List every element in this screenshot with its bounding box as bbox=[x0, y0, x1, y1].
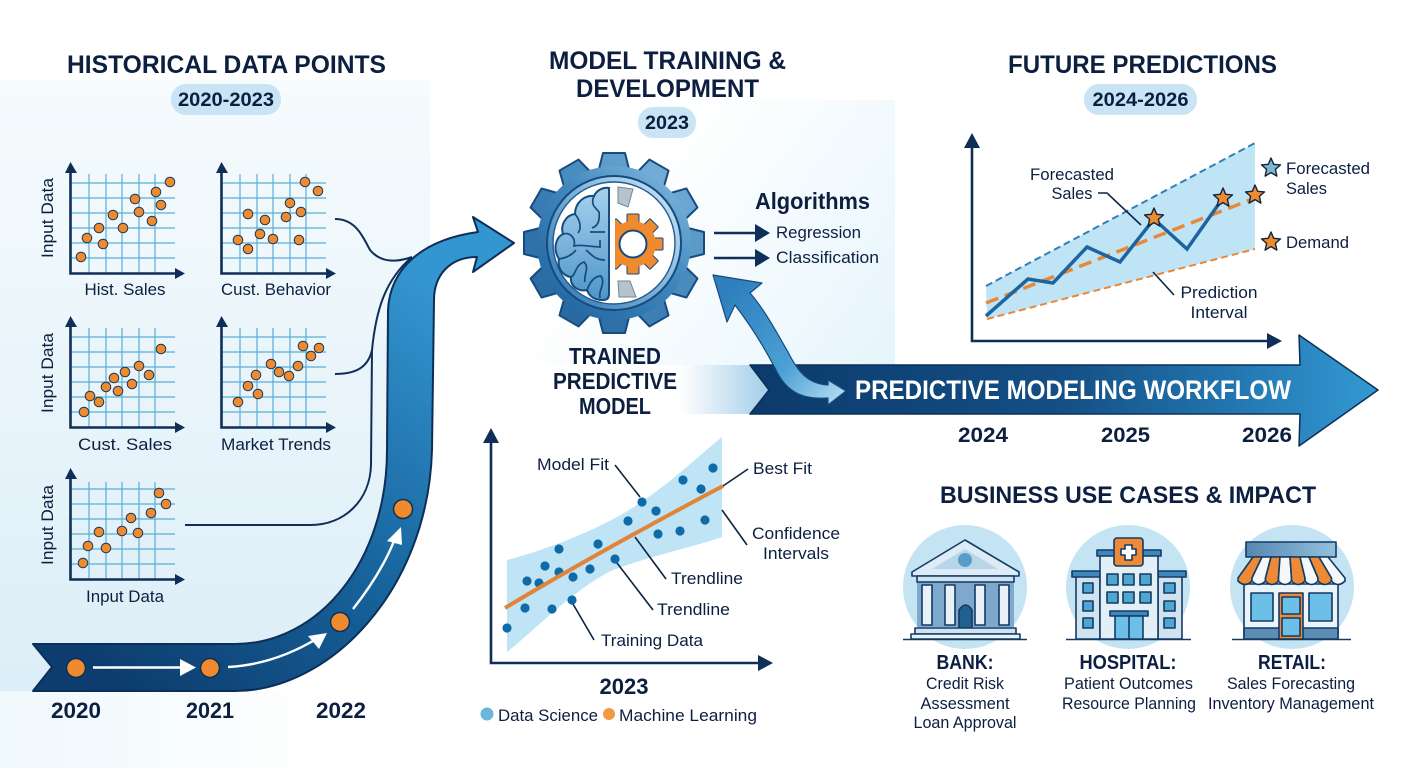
annotation labels: Intervals bbox=[763, 544, 829, 563]
panel: model training background bbox=[430, 100, 895, 365]
chart: cust. sales: Cust. Sales bbox=[78, 435, 172, 454]
heading: historical data points: HISTORICAL DATA POINTS bbox=[67, 51, 386, 79]
gray inserts bbox=[618, 187, 636, 297]
legend: data science and machine learning: Machine Learning bbox=[619, 706, 757, 725]
use case: bank: Credit Risk bbox=[926, 674, 1004, 693]
chart: cust. behavior: Cust. Behavior bbox=[221, 280, 331, 299]
use case: retail bbox=[1208, 525, 1374, 713]
timeline years: 2021 bbox=[186, 698, 234, 723]
annotation: forecasted sales bbox=[1030, 165, 1141, 225]
timeline ribbon arrow bbox=[33, 217, 514, 691]
annotation: forecasted sales: Forecasted bbox=[1030, 165, 1114, 184]
forecast line bbox=[986, 198, 1223, 316]
annotation labels: Model Fit bbox=[537, 455, 609, 474]
gear body bbox=[537, 166, 691, 320]
annotation leaders bbox=[573, 465, 748, 640]
annotation: forecasted sales: Sales bbox=[1052, 184, 1092, 203]
chart: future predictions bbox=[964, 133, 1370, 349]
label: 2023: 2023 bbox=[600, 674, 648, 699]
heading: model training: 2023 bbox=[645, 113, 689, 134]
chart: model fit 2023 bbox=[483, 428, 840, 671]
prediction band bbox=[986, 143, 1255, 319]
white flow arrows bbox=[93, 536, 396, 668]
axes bbox=[491, 436, 762, 663]
brain folds bbox=[559, 196, 605, 298]
heading: business use cases: BUSINESS USE CASES & IMPACT bbox=[940, 482, 1316, 509]
legend: forecasted sales bbox=[1262, 158, 1370, 198]
algorithms list: Regression bbox=[776, 223, 861, 242]
timeline years: 2020 bbox=[51, 698, 101, 723]
heading: model training: DEVELOPMENT bbox=[576, 75, 759, 103]
workflow years: 2024 bbox=[958, 424, 1008, 447]
workflow years: 2025 bbox=[1101, 424, 1150, 447]
chart: hist. sales: Input Data bbox=[38, 177, 57, 258]
white arrowheads bbox=[180, 527, 402, 676]
chart: hist. sales bbox=[38, 162, 185, 299]
chart: market trends: Market Trends bbox=[221, 435, 331, 454]
double-headed curved arrow bbox=[713, 275, 846, 405]
workflow years: 2026 bbox=[1242, 424, 1292, 447]
chart: cust. sales bbox=[38, 316, 185, 454]
panel: historical data background bbox=[0, 80, 432, 691]
heading: future predictions: 2024-2026 bbox=[1092, 90, 1188, 111]
use case: hospital: HOSPITAL: bbox=[1080, 652, 1176, 674]
legend: demand bbox=[1262, 232, 1349, 252]
axes bbox=[972, 142, 1270, 341]
legend: demand: Demand bbox=[1286, 233, 1349, 252]
label: trained predictive model bbox=[553, 343, 677, 419]
brain bbox=[556, 188, 609, 300]
timeline years bbox=[51, 698, 366, 723]
label: trained predictive model: MODEL bbox=[579, 393, 651, 419]
annotation labels: Trendline bbox=[657, 600, 730, 619]
fade behind workflow arrow bbox=[680, 365, 772, 414]
algorithms list: Algorithms bbox=[755, 188, 870, 214]
algorithms list: Classification bbox=[776, 248, 879, 267]
demand trend bbox=[986, 198, 1255, 303]
annotation labels bbox=[537, 455, 840, 650]
use case: bank: Assessment bbox=[920, 694, 1010, 713]
use case: bank: BANK: bbox=[936, 652, 994, 674]
annotation: prediction interval bbox=[1153, 272, 1258, 322]
heading: historical data points bbox=[67, 51, 386, 115]
chart: input data: Input Data bbox=[86, 587, 165, 606]
heading: model training: MODEL TRAINING & bbox=[549, 47, 786, 75]
annotation labels: Best Fit bbox=[753, 459, 812, 478]
use case: hospital bbox=[1062, 525, 1196, 713]
chart: input data: Input Data bbox=[38, 484, 57, 565]
label: trained predictive model: PREDICTIVE bbox=[553, 368, 677, 394]
forecast stars bbox=[1144, 185, 1264, 226]
icon: retail store bbox=[1232, 542, 1351, 640]
workflow arrow: PREDICTIVE MODELING WORKFLOW bbox=[855, 375, 1291, 405]
connector lines from charts to ribbon bbox=[185, 219, 412, 525]
legend: data science and machine learning bbox=[480, 706, 757, 725]
label: trained predictive model: TRAINED bbox=[569, 343, 661, 369]
legend: data science and machine learning: Data Science bbox=[498, 706, 598, 725]
gear teeth bbox=[524, 153, 704, 333]
annotation labels: Trendline bbox=[671, 569, 743, 588]
chart: cust. behavior bbox=[216, 162, 336, 299]
training points bbox=[502, 463, 718, 633]
legend: forecasted sales: Sales bbox=[1286, 179, 1327, 198]
icon: bank building bbox=[903, 540, 1027, 640]
heading: model training bbox=[549, 47, 786, 138]
use case: bank bbox=[903, 525, 1027, 732]
heading: future predictions: FUTURE PREDICTIONS bbox=[1008, 51, 1277, 79]
annotation labels: Confidence bbox=[752, 524, 840, 543]
annotation: prediction interval: Prediction bbox=[1180, 283, 1258, 302]
use case: bank: Loan Approval bbox=[914, 713, 1016, 732]
chart: input data bbox=[38, 468, 185, 606]
heading: historical data points: 2020-2023 bbox=[178, 90, 274, 111]
use case: retail: Inventory Management bbox=[1208, 694, 1374, 713]
use case: retail: Sales Forecasting bbox=[1227, 674, 1355, 693]
workflow years bbox=[958, 424, 1292, 447]
timeline dots bbox=[66, 500, 412, 678]
legend: forecasted sales: Forecasted bbox=[1286, 159, 1370, 178]
orange gear bbox=[615, 214, 664, 274]
algorithms list bbox=[714, 188, 879, 267]
use case: hospital: Patient Outcomes bbox=[1064, 674, 1193, 693]
best fit line bbox=[505, 486, 723, 608]
annotation: prediction interval: Interval bbox=[1190, 303, 1248, 322]
chart: hist. sales: Hist. Sales bbox=[84, 280, 166, 299]
chart: cust. sales: Input Data bbox=[38, 332, 57, 413]
heading: future predictions bbox=[1008, 51, 1277, 115]
annotation labels: Training Data bbox=[601, 631, 704, 650]
confidence band bbox=[507, 437, 722, 652]
panel: bottom left fade bbox=[0, 691, 330, 768]
workflow arrow bbox=[750, 335, 1378, 446]
chart: market trends bbox=[216, 316, 336, 454]
algorithm arrows bbox=[714, 233, 760, 258]
icon: hospital building bbox=[1066, 538, 1191, 640]
icon: gear with brain bbox=[524, 153, 704, 333]
use case: hospital: Resource Planning bbox=[1062, 694, 1196, 713]
timeline years: 2022 bbox=[316, 698, 366, 723]
use case: retail: RETAIL: bbox=[1258, 652, 1326, 674]
